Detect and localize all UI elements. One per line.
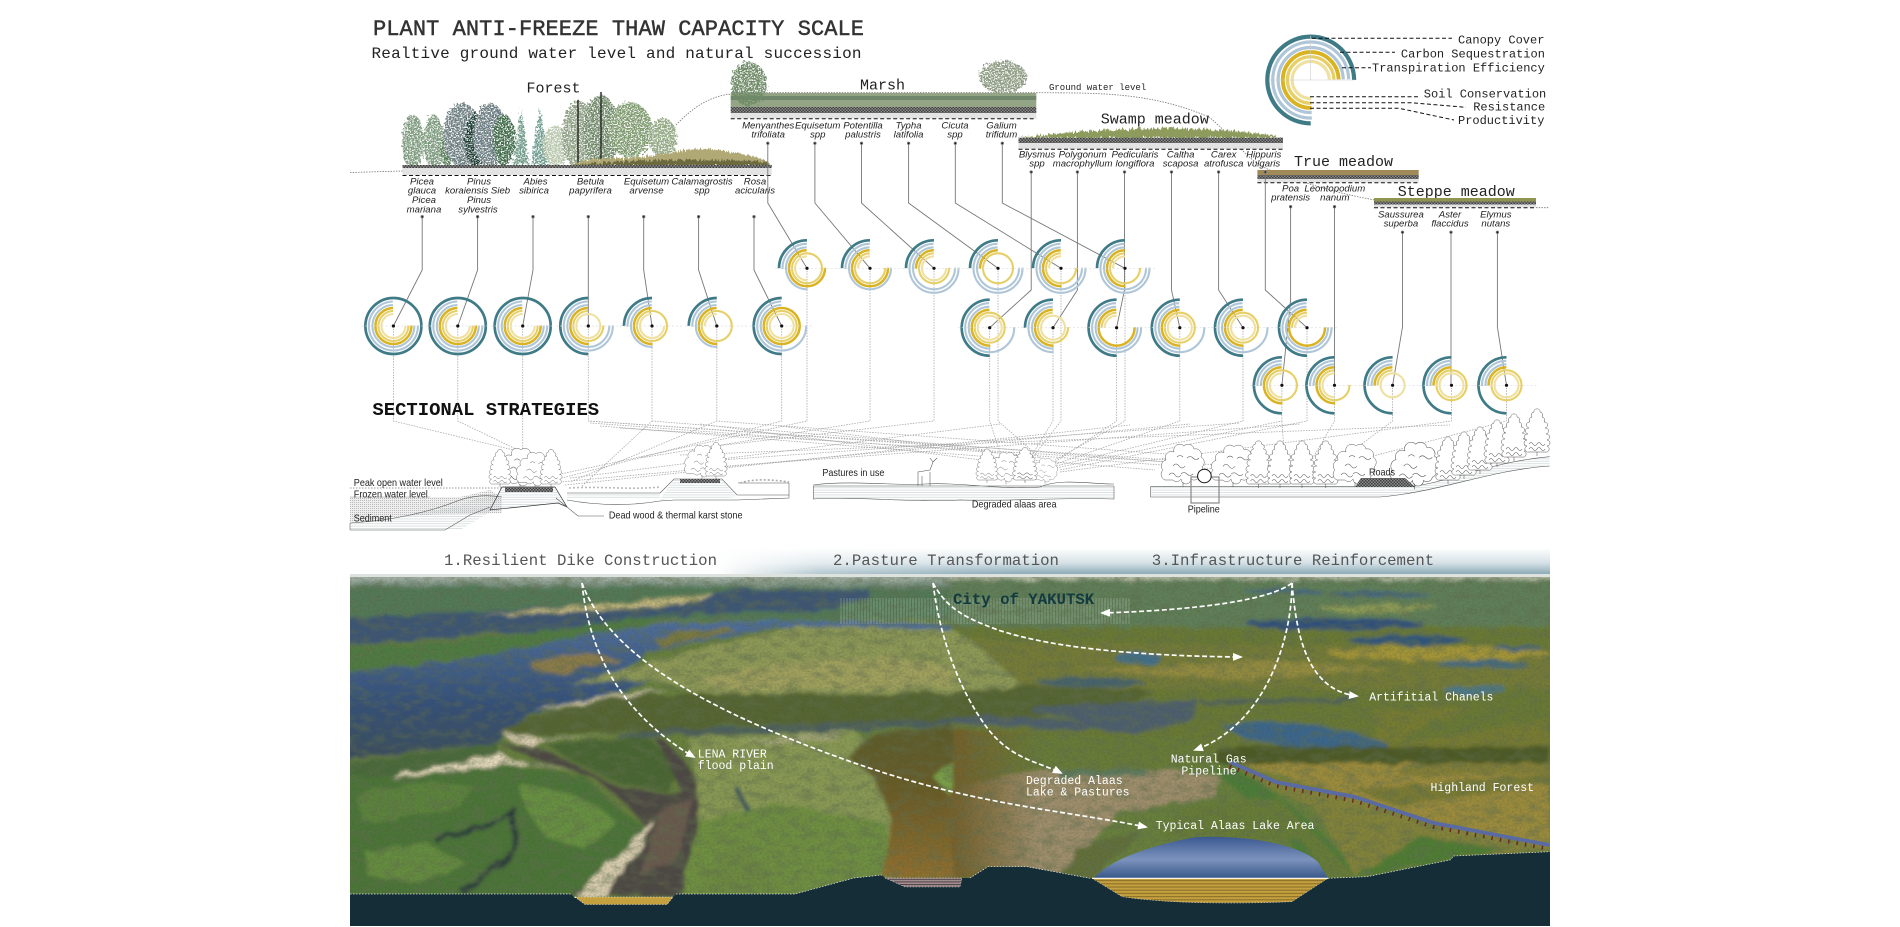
illustration: forest trees [402,95,677,169]
city of Yakutsk hatching [840,598,1130,624]
species labels: true meadow: Poa [1282,184,1299,195]
right half in image coordinates [952,563,1553,878]
species labels: forest: Rosa [744,176,766,187]
species labels: forest: sibirica [519,186,549,197]
species labels: forest: papyrifera [568,186,612,197]
legend leader lines [1310,38,1466,120]
soft blend from the brown alaas into the tan ground [952,730,1039,878]
pipeline in landscape [1230,762,1549,848]
species labels: swamp meadow: atrofusca [1204,159,1243,170]
section 1: resilient dike [350,442,789,530]
title: PLANT ANTI-FREEZE THAW CAPACITY SCALE [373,17,864,42]
species labels: forest: Picea [412,195,436,206]
sky band [716,548,1550,578]
species labels: forest [407,176,775,215]
species labels: marsh: Typha [896,120,922,131]
heading: marsh: Marsh [860,77,905,94]
legend [1267,33,1546,128]
species labels: steppe meadow: Elymus [1480,210,1512,221]
landscape labels [698,692,1534,833]
species labels: forest: Abies [522,176,548,187]
landscape labels: flood plain [698,760,774,773]
species labels: swamp meadow: Carex [1211,149,1238,160]
dotted drop lines from charts to sections [393,268,1506,487]
species labels: marsh: spp [947,130,963,141]
heading: true meadow: True meadow [1294,154,1393,171]
species labels: marsh: trifidum [986,130,1017,141]
legend labels: Soil Conservation [1424,87,1546,101]
species labels: marsh: Potentilla [843,120,883,131]
species labels: marsh: spp [810,130,826,141]
true meadow band [1257,170,1419,175]
landscape labels: Typical Alaas Lake Area [1156,820,1315,833]
aerial heading 2: 2.Pasture Transformation [833,552,1059,570]
species labels: forest: sylvestris [458,204,498,215]
species labels: steppe meadow [1378,210,1512,230]
ground profile [350,852,1550,926]
trees [1161,409,1550,489]
pasture trees [976,448,1058,484]
marsh band [731,93,1036,107]
species labels: steppe meadow: Saussurea [1378,210,1424,221]
section 1 labels: Dead wood & thermal karst stone [609,510,743,521]
profile dotted outline [350,852,1550,894]
left half in image coordinates [340,573,973,897]
species labels: true meadow: pratensis [1270,192,1310,203]
legend labels: Resistance [1473,101,1545,115]
legend labels: Canopy Cover [1458,33,1544,47]
radial charts: swamp meadow species [958,300,1339,356]
pasture sediment [885,878,962,887]
legend rings [1267,37,1354,123]
mottling overlay [350,577,1550,897]
species labels: forest: Equisetum [624,176,669,187]
leader lines from species to charts [393,142,1506,385]
lake sediment: Lena [575,897,673,904]
species labels: true meadow: Leontopodium [1304,184,1365,195]
legend labels: Carbon Sequestration [1401,47,1545,61]
section 2: pasture [813,448,1114,511]
species labels: steppe meadow: flaccidus [1431,219,1469,230]
species labels: steppe meadow: nutans [1481,219,1510,230]
steppe meadow band [1374,198,1536,202]
species labels: swamp meadow: longiflora [1116,159,1154,170]
species labels: marsh: trifoliata [751,130,785,141]
section 3: infrastructure [1151,409,1550,516]
species labels: swamp meadow: Pedicularis [1112,149,1159,160]
heading: swamp meadow: Swamp meadow [1101,111,1209,128]
species labels: swamp meadow: vulgaris [1247,159,1280,170]
marsh tree, left [731,62,767,106]
landscape labels: LENA RIVER [698,748,767,761]
section 2 labels: Pastures in use [822,468,885,479]
panel: true meadow [1257,154,1419,203]
landscape [340,563,1560,910]
marsh tree, right [979,61,1027,93]
species labels: steppe meadow: superba [1384,219,1418,230]
legend labels [1372,33,1546,128]
landscape labels: Pipeline [1181,765,1237,778]
species labels: swamp meadow: macrophyllum [1053,159,1112,170]
alaas lake sediment [1092,878,1328,903]
species labels: forest: spp [694,186,710,197]
radial charts: marsh species [775,240,1157,296]
species labels: forest: koraiensis Sieb [445,186,511,197]
species labels: true meadow [1270,184,1365,203]
species labels: swamp meadow: Polygonum [1059,149,1107,160]
landscape labels: Highland Forest [1430,782,1534,795]
species labels: forest: Pinus [467,195,491,206]
ground water level curve [350,93,1549,208]
water hatch and sediment [350,490,502,522]
panel: marsh [731,61,1036,141]
typical alaas lake [1094,837,1328,878]
aerial view [340,548,1560,926]
species labels: swamp meadow: Hippuris [1246,149,1281,160]
legend labels: Transpiration Efficiency [1372,61,1545,75]
landscape labels: Lake & Pastures [1026,787,1130,800]
aerial heading 3: 3.Infrastructure Reinforcement [1152,552,1434,570]
section 1 labels: Frozen water level [354,490,428,501]
species labels: forest: Pinus [467,176,491,187]
species labels: marsh: Galium [986,120,1017,131]
ground layers [402,165,772,168]
species labels: forest: mariana [407,204,441,215]
road [1355,478,1415,487]
species labels: swamp meadow [1019,149,1281,170]
species labels: marsh [742,120,1017,141]
species labels: marsh: Cicuta [941,120,969,131]
dike trees [489,442,727,489]
heading: forest: Forest [526,80,581,98]
section 1 labels: Sediment [354,514,392,525]
tail of the farmland and forest band across the seam [952,629,1023,693]
grain overlay [350,577,1550,897]
landscape labels: Artifitial Chanels [1369,692,1493,705]
deer [918,458,937,486]
landscape labels: Degraded Alaas [1026,775,1123,788]
section 1 labels: Peak open water level [354,478,443,489]
species labels: forest: glauca [408,186,436,197]
species labels: swamp meadow: spp [1029,159,1045,170]
species labels: forest: Picea [410,176,434,187]
species labels: forest: Betula [577,176,604,187]
section 3 labels: Pipeline [1188,505,1220,516]
dike embankments [350,496,430,498]
species labels: forest: acicularis [735,186,775,197]
species labels: marsh: Menyanthes [742,120,795,131]
landscape labels: Natural Gas [1171,754,1247,767]
species labels: true meadow: nanum [1320,192,1349,203]
label: ground water level: Ground water level [1049,83,1146,93]
species labels: swamp meadow: Blysmus [1019,149,1055,160]
illustration: birch trunks [578,92,601,166]
species labels: marsh: Equisetum [795,120,840,131]
illustration: forest grass [570,149,771,165]
legend labels: Productivity [1458,114,1544,128]
callout line [556,498,604,516]
city label: City of YAKUTSK [953,591,1095,609]
section 3: infrastructure: Roads [1369,468,1395,479]
section 2: pasture: Degraded alaas area [972,500,1057,511]
section 1 labels [354,478,743,525]
heading: steppe meadow: Steppe meadow [1398,184,1515,201]
panel: steppe meadow [1374,184,1536,230]
arrows [582,583,1357,827]
radial charts: forest species [361,298,814,354]
species labels: forest: arvense [629,186,664,197]
terrain [1151,457,1550,497]
species labels: marsh: latifolia [894,130,924,141]
species labels: marsh: palustris [844,130,881,141]
species labels: swamp meadow: Caltha [1167,149,1194,160]
species labels: swamp meadow: scaposa [1163,159,1198,170]
species labels: steppe meadow: Aster [1438,210,1462,221]
species labels: forest: Calamagrostis [671,176,733,187]
panel: swamp meadow [1018,111,1283,170]
aerial heading 1: 1.Resilient Dike Construction [444,552,717,570]
heading: sectional strategies: SECTIONAL STRATEGIES [372,399,599,421]
panel: forest [402,80,775,215]
pipeline [1191,469,1219,503]
radial charts: true and steppe meadow species [1250,357,1538,413]
subtitle: Realtive ground water level and natural succession [372,45,862,63]
swamp grass mound [1019,128,1283,138]
